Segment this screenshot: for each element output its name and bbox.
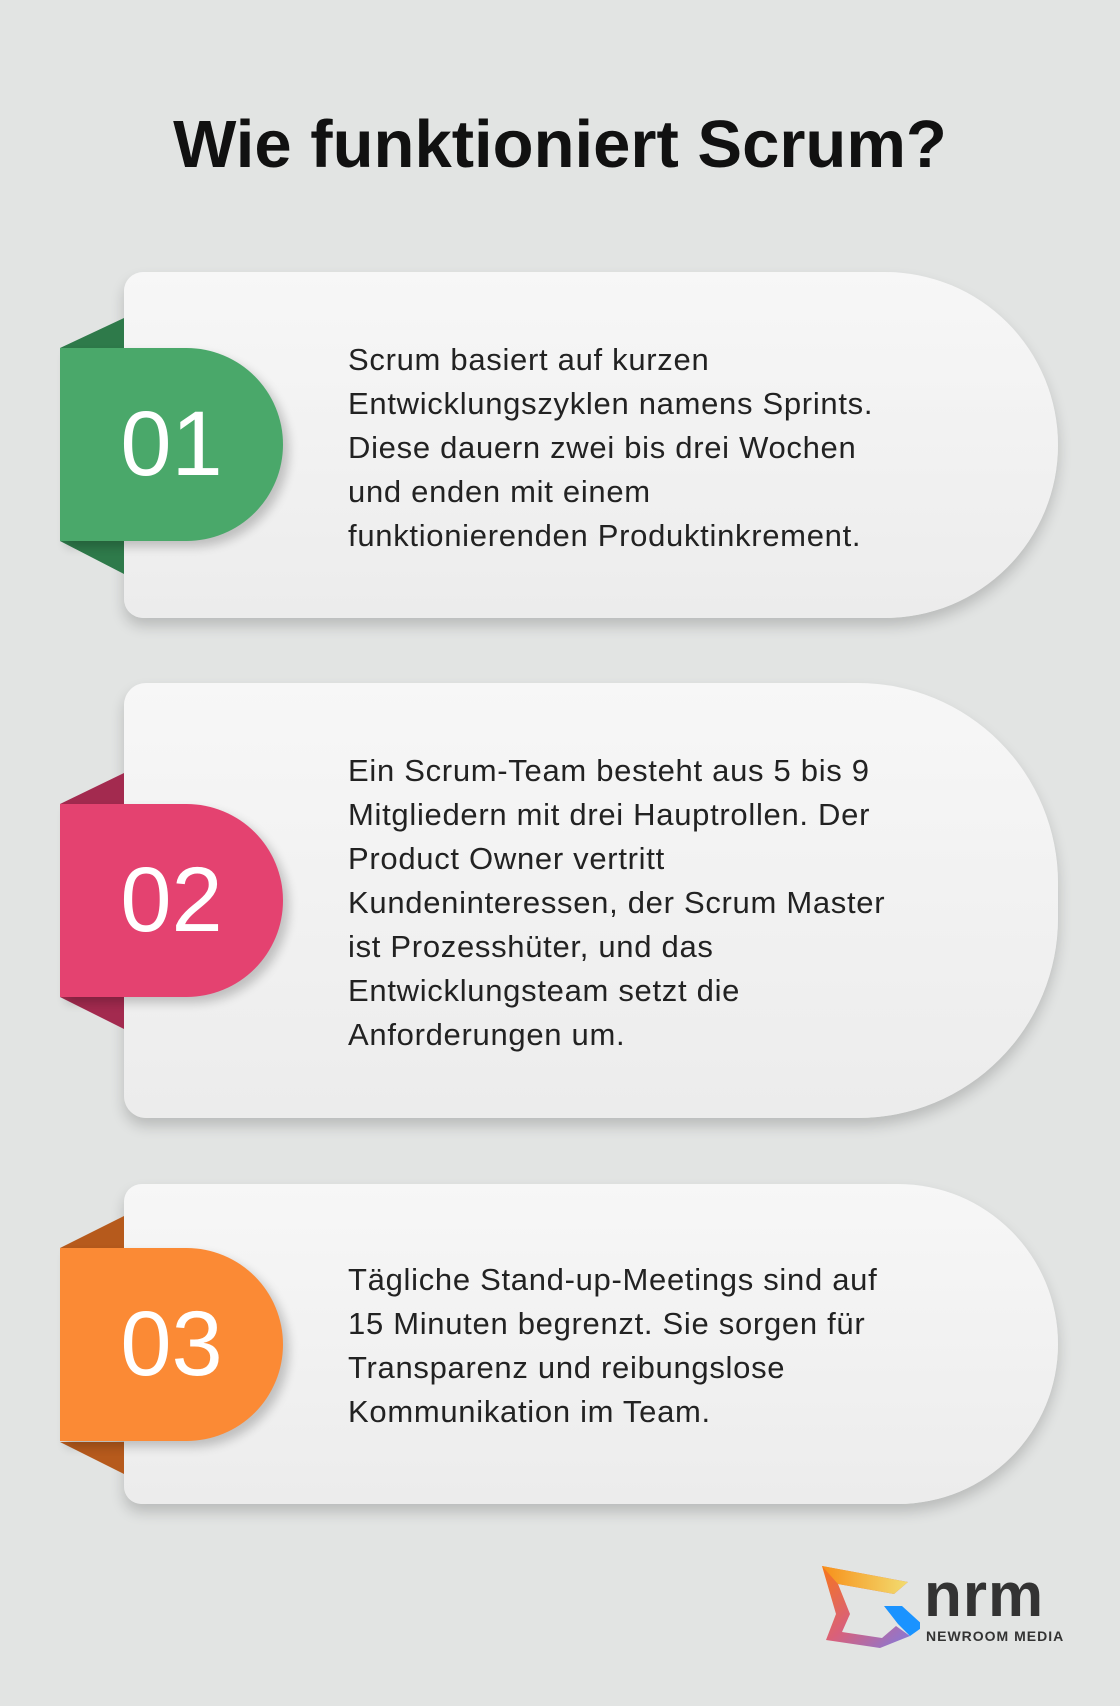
badge 03: 03 xyxy=(120,1293,223,1395)
panel: step 2 xyxy=(60,683,1064,1132)
card 2 xyxy=(124,683,1058,1118)
text 3 xyxy=(348,1262,877,1429)
text 2: ist Prozesshüter, und das xyxy=(348,929,714,964)
card 1 xyxy=(124,272,1058,618)
text 1 xyxy=(348,342,873,553)
panel: step 3 xyxy=(60,1184,1064,1518)
icon: logo mark xyxy=(822,1566,920,1648)
text 2: Kundeninteressen, der Scrum Master xyxy=(348,885,885,920)
text 1: Scrum basiert auf kurzen xyxy=(348,342,709,377)
text 2 xyxy=(348,753,885,1052)
text 2: Mitgliedern mit drei Hauptrollen. Der xyxy=(348,797,870,832)
badge 03 xyxy=(60,1248,283,1441)
text 2: Product Owner vertritt xyxy=(348,841,665,876)
text 3: Transparenz und reibungslose xyxy=(348,1350,785,1385)
logo text: nrm xyxy=(924,1561,1044,1630)
text 3: Kommunikation im Team. xyxy=(348,1394,711,1429)
title: Wie funktioniert Scrum? xyxy=(173,107,947,182)
logo xyxy=(822,1561,1064,1648)
text 3: Tägliche Stand-up-Meetings sind auf xyxy=(348,1262,877,1297)
text 2: Anforderungen um. xyxy=(348,1017,625,1052)
badge 02 xyxy=(60,804,283,997)
badge 02: 02 xyxy=(120,849,223,951)
text 2: Entwicklungsteam setzt die xyxy=(348,973,740,1008)
card 3 xyxy=(124,1184,1058,1504)
fold 3 xyxy=(60,1216,124,1474)
fold 1 xyxy=(60,318,124,574)
badge 01 xyxy=(60,348,283,541)
text 1: Diese dauern zwei bis drei Wochen xyxy=(348,430,856,465)
logo: NEWROOM MEDIA xyxy=(926,1628,1064,1644)
text 1: und enden mit einem xyxy=(348,474,651,509)
badge 01: 01 xyxy=(120,393,223,495)
panel: step 1 xyxy=(60,272,1064,632)
fold 2 xyxy=(60,773,124,1029)
text 1: Entwicklungszyklen namens Sprints. xyxy=(348,386,873,421)
text 2: Ein Scrum-Team besteht aus 5 bis 9 xyxy=(348,753,870,788)
text 3: 15 Minuten begrenzt. Sie sorgen für xyxy=(348,1306,865,1341)
text 1: funktionierenden Produktinkrement. xyxy=(348,518,861,553)
